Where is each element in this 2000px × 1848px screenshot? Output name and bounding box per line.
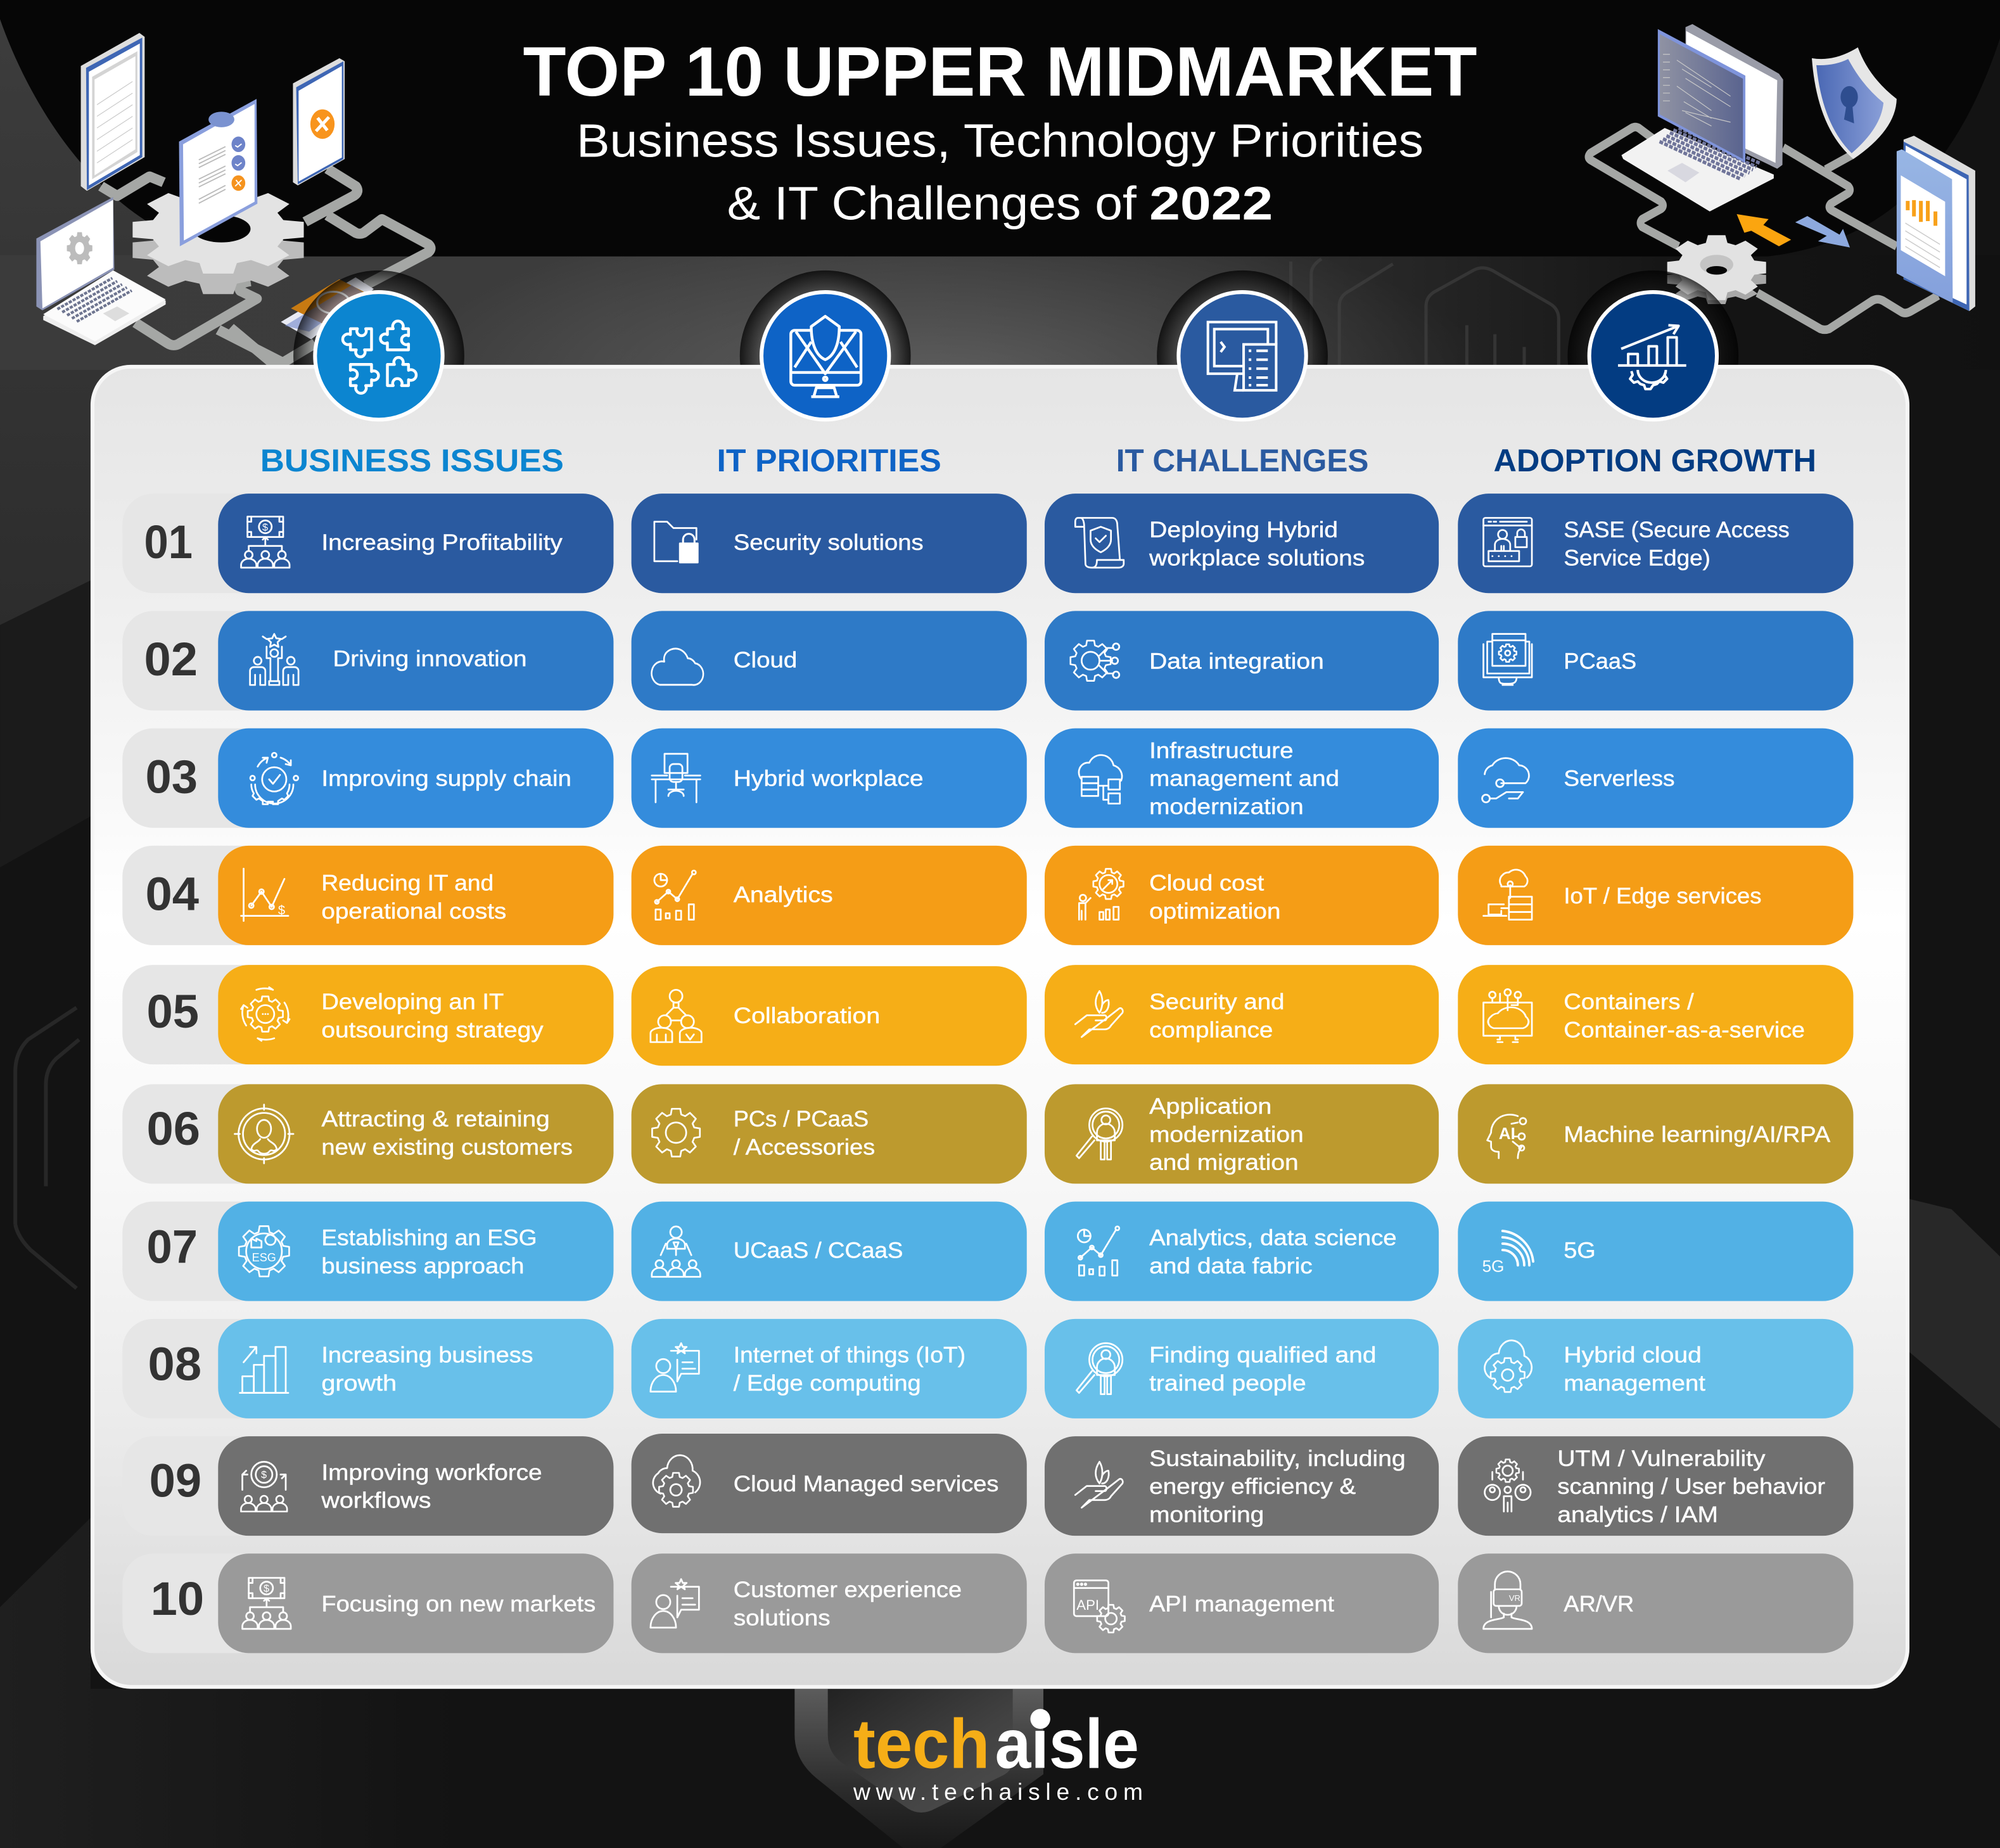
label: workflows xyxy=(321,1488,431,1513)
column badge: IT priorities secure mail monitor xyxy=(761,292,889,419)
label: / Edge computing xyxy=(734,1371,921,1396)
heading: IT priorities: IT PRIORITIES xyxy=(717,442,941,478)
label xyxy=(1149,1343,1376,1396)
icon: analytics xyxy=(654,870,696,920)
label xyxy=(1149,1446,1406,1527)
clipboard xyxy=(179,99,257,246)
icon: magnifier person xyxy=(1076,1109,1123,1159)
label xyxy=(321,871,506,924)
label: business approach xyxy=(321,1254,525,1278)
label: operational costs xyxy=(321,899,506,924)
icon: growth bars xyxy=(240,1347,288,1393)
card: Attracting and retaining xyxy=(218,1084,613,1183)
laptop xyxy=(1621,24,1783,212)
card: UCaaS / CCaaS xyxy=(632,1202,1027,1301)
label: Sustainability, including xyxy=(1149,1446,1406,1471)
icon: gear xyxy=(652,1109,700,1157)
label: Infrastructure xyxy=(1149,738,1294,763)
card: Collaboration xyxy=(632,966,1027,1066)
label xyxy=(321,1225,537,1278)
label: Attracting & retaining xyxy=(321,1107,550,1131)
gear xyxy=(1667,235,1766,304)
card: Finding qualified xyxy=(1045,1319,1439,1418)
label: PCs / PCaaS xyxy=(734,1107,869,1131)
label: Focusing on new markets xyxy=(321,1591,596,1616)
icon: users and gear xyxy=(1485,1460,1531,1512)
label: workplace solutions xyxy=(1149,545,1365,570)
card: Focusing on new markets xyxy=(218,1553,613,1653)
title: TOP 10 UPPER MIDMARKET xyxy=(523,33,1477,111)
label: AR/VR xyxy=(1564,1591,1634,1616)
label: Improving supply chain xyxy=(321,767,571,791)
label xyxy=(321,1460,542,1513)
icon: scroll shield xyxy=(1075,518,1124,568)
label: Collaboration xyxy=(734,1004,880,1028)
label: Containers / xyxy=(1564,990,1694,1014)
icon: hand and plant xyxy=(1075,1462,1123,1508)
icon: hand and plant xyxy=(1075,991,1123,1037)
rank 08: 08 xyxy=(148,1337,201,1390)
label: Container-as-a-service xyxy=(1564,1017,1805,1042)
label: Internet of things (IoT) xyxy=(734,1343,965,1368)
card: Security and compliance xyxy=(1045,965,1439,1064)
icon: serverless cloud xyxy=(1482,758,1529,802)
card: Infrastructure xyxy=(1045,729,1439,828)
rank 09: 09 xyxy=(150,1455,201,1507)
tablet xyxy=(81,33,144,191)
label: modernization xyxy=(1149,1122,1304,1147)
icon: money and people xyxy=(243,1578,291,1629)
label: Security and xyxy=(1149,990,1284,1014)
icon: analytics xyxy=(1078,1227,1119,1275)
card: Hybrid workplace xyxy=(632,729,1027,828)
card: Deploying Hybrid workplace solutions xyxy=(1045,494,1439,593)
label: and migration xyxy=(1149,1150,1299,1175)
icon: desk xyxy=(652,754,700,802)
label xyxy=(1149,990,1284,1042)
label xyxy=(1149,518,1365,570)
icon: AI head xyxy=(1487,1114,1526,1158)
card: PCaaS xyxy=(1458,611,1853,710)
column badge: adoption growth chart and gear xyxy=(1589,292,1717,419)
label xyxy=(734,1343,965,1396)
label: Service Edge) xyxy=(1564,545,1710,570)
rank 04: 04 xyxy=(146,868,200,921)
card: UTM xyxy=(1458,1436,1853,1536)
gear xyxy=(132,186,304,294)
rank 02: 02 xyxy=(144,633,198,685)
label: analytics / IAM xyxy=(1557,1502,1718,1527)
rank 05: 05 xyxy=(147,985,199,1038)
label xyxy=(321,1343,533,1396)
label: Cloud cost xyxy=(1149,871,1264,896)
card: Analytics, data science xyxy=(1045,1202,1439,1301)
card: Application modernization xyxy=(1045,1084,1439,1183)
label: Finding qualified and xyxy=(1149,1343,1376,1368)
label: PCaaS xyxy=(1564,649,1636,673)
heading: business issues: BUSINESS ISSUES xyxy=(260,442,564,478)
label: energy efficiency & xyxy=(1149,1474,1356,1499)
label: API management xyxy=(1149,1591,1334,1616)
card: Security solutions xyxy=(632,494,1027,593)
laptop xyxy=(36,197,166,345)
arrows xyxy=(1736,214,1850,248)
card: Machine learning xyxy=(1458,1084,1853,1183)
label: Reducing IT and xyxy=(321,871,494,896)
label xyxy=(734,1577,962,1630)
label: Serverless xyxy=(1564,767,1675,791)
card: Developing an IT outsourcing strategy xyxy=(218,965,613,1064)
icon: cloud servers xyxy=(1079,755,1122,803)
icon: cloud gear xyxy=(1485,1341,1532,1392)
label: SASE (Secure Access xyxy=(1564,518,1790,542)
subtitle xyxy=(576,115,1424,229)
icon: desktop service xyxy=(1484,634,1532,685)
icon: outsourcing gear xyxy=(241,987,290,1041)
label: Analytics, data science xyxy=(1149,1225,1397,1250)
conduit lines xyxy=(101,169,430,369)
label: Application xyxy=(1149,1094,1271,1119)
icon: communication tree xyxy=(652,1227,700,1277)
icon: person with chat xyxy=(651,1579,699,1628)
card: PCs / PCaaS xyxy=(632,1084,1027,1183)
circle halos xyxy=(293,271,1738,442)
phone xyxy=(293,58,345,186)
icon: VR headset xyxy=(1484,1571,1532,1629)
label: / Accessories xyxy=(734,1135,875,1160)
label xyxy=(1564,518,1790,570)
card: AR/VR xyxy=(1458,1553,1853,1653)
icon: cost chart xyxy=(241,869,288,921)
card: SASE xyxy=(1458,494,1853,593)
card: Containers xyxy=(1458,965,1853,1064)
label: Driving innovation xyxy=(333,646,527,671)
column badge: IT challenges monitor and server xyxy=(1178,292,1306,419)
card: Improving supply chain xyxy=(218,729,613,828)
icon: workforce money xyxy=(241,1462,287,1512)
label xyxy=(1564,1343,1705,1396)
label xyxy=(321,990,544,1042)
rank 06: 06 xyxy=(147,1102,200,1155)
label: Hybrid workplace xyxy=(734,767,924,791)
label: Increasing business xyxy=(321,1343,533,1368)
label: monitoring xyxy=(1149,1502,1264,1527)
card: Hybrid cloud management xyxy=(1458,1319,1853,1418)
icon: collaboration xyxy=(651,990,701,1042)
card: Establishing an ESG xyxy=(218,1202,613,1301)
card: Internet of things xyxy=(632,1319,1027,1418)
icon: star team xyxy=(250,634,298,685)
card: Increasing business growth xyxy=(218,1319,613,1418)
card: Improving workforce workflows xyxy=(218,1436,613,1536)
main panel xyxy=(92,367,1908,1687)
label: growth xyxy=(321,1371,397,1396)
card: 5G xyxy=(1458,1202,1853,1301)
icon: API window xyxy=(1074,1581,1124,1633)
label: Security solutions xyxy=(734,530,924,555)
label: Improving workforce xyxy=(321,1460,542,1485)
label: new existing customers xyxy=(321,1135,573,1160)
label: compliance xyxy=(1149,1017,1273,1042)
card: Sustainability xyxy=(1045,1436,1439,1536)
label: Increasing Profitability xyxy=(321,530,563,555)
label: and data fabric xyxy=(1149,1254,1313,1278)
label xyxy=(1564,990,1805,1042)
card: Reducing IT and operational costs xyxy=(218,846,613,945)
label xyxy=(1149,871,1280,924)
card: IoT / Edge services xyxy=(1458,846,1853,945)
icon: cloud xyxy=(652,649,703,685)
rank 10: 10 xyxy=(151,1572,204,1625)
heading: adoption growth: ADOPTION GROWTH xyxy=(1494,442,1816,478)
card: API management xyxy=(1045,1553,1439,1653)
rank 03: 03 xyxy=(146,750,198,803)
icon: iot servers xyxy=(1484,870,1532,920)
label xyxy=(321,1107,573,1160)
label: Customer experience xyxy=(734,1577,962,1602)
label: management and xyxy=(1149,767,1339,791)
card: Increasing Profitability xyxy=(218,494,613,593)
subtitle: Business Issues, Technology Priorities xyxy=(576,115,1424,167)
label: modernization xyxy=(1149,794,1304,819)
label: 5G xyxy=(1564,1239,1596,1263)
label: optimization xyxy=(1149,899,1280,924)
icon: data gear xyxy=(1071,640,1119,681)
heading: IT challenges: IT CHALLENGES xyxy=(1116,442,1368,478)
label: Machine learning/AI/RPA xyxy=(1564,1122,1831,1147)
label: Developing an IT xyxy=(321,990,504,1014)
label xyxy=(1557,1446,1825,1527)
rank tabs xyxy=(122,494,326,1653)
icon: cloud gear xyxy=(653,1455,700,1507)
label: Cloud xyxy=(734,647,797,672)
card: Cloud xyxy=(632,611,1027,710)
label: UCaaS / CCaaS xyxy=(734,1239,903,1263)
clock card xyxy=(281,277,374,340)
label: scanning / User behavior xyxy=(1557,1474,1825,1499)
icon: supply gear xyxy=(250,753,298,804)
subtitle: & IT Challenges of xyxy=(727,177,1137,229)
icon: secure window xyxy=(1484,518,1532,566)
label xyxy=(1149,1094,1304,1175)
card: Customer experience solutions xyxy=(632,1553,1027,1653)
label: Data integration xyxy=(1149,649,1324,673)
icon: money and people xyxy=(241,516,290,568)
label: IoT / Edge services xyxy=(1564,884,1761,908)
label: UTM / Vulnerability xyxy=(1557,1446,1766,1471)
icon: ESG gear xyxy=(239,1226,289,1277)
logo xyxy=(853,1705,1139,1783)
website: www.techaisle.com xyxy=(853,1778,1143,1805)
conduit lines xyxy=(1589,127,1938,329)
icon: magnifier person xyxy=(1076,1343,1123,1394)
icon: container cloud xyxy=(1484,989,1532,1042)
illustration: devices connected to gear (left) xyxy=(36,33,430,369)
label: Cloud Managed services xyxy=(734,1472,998,1496)
subtitle: 2022 xyxy=(1149,177,1273,229)
logo: tech xyxy=(853,1705,990,1783)
label: Establishing an ESG xyxy=(321,1225,537,1250)
label: management xyxy=(1564,1371,1705,1396)
label xyxy=(1149,1225,1397,1278)
card: Cloud cost optimization xyxy=(1045,846,1439,945)
icon: folder lock xyxy=(654,521,697,563)
shield xyxy=(1812,48,1897,159)
card: Data integration xyxy=(1045,611,1439,710)
icon: 5G signal xyxy=(1482,1231,1533,1275)
column badge: business issues puzzle xyxy=(315,292,443,419)
card: Analytics xyxy=(632,846,1027,945)
label xyxy=(1149,738,1339,819)
label: Analytics xyxy=(734,883,833,907)
icon: person with chat xyxy=(651,1343,699,1392)
rank 07: 07 xyxy=(147,1220,198,1273)
footer badge xyxy=(794,1689,1043,1848)
illustration: laptop, shield and phone (right) xyxy=(1589,24,1975,329)
label: Hybrid cloud xyxy=(1564,1343,1702,1368)
logo: aisle xyxy=(995,1705,1139,1783)
label xyxy=(734,1107,875,1160)
label: outsourcing strategy xyxy=(321,1017,544,1042)
label: solutions xyxy=(734,1605,831,1630)
card: Serverless xyxy=(1458,729,1853,828)
label: Deploying Hybrid xyxy=(1149,518,1338,542)
label: trained people xyxy=(1149,1371,1306,1396)
header black backdrop xyxy=(0,0,2000,257)
icon: target person xyxy=(234,1105,293,1163)
icon: cost optimization xyxy=(1079,869,1123,920)
card: Driving innovation xyxy=(218,611,613,710)
card: Cloud Managed services xyxy=(632,1434,1027,1533)
phone xyxy=(1897,136,1975,311)
rank 01: 01 xyxy=(144,516,193,568)
